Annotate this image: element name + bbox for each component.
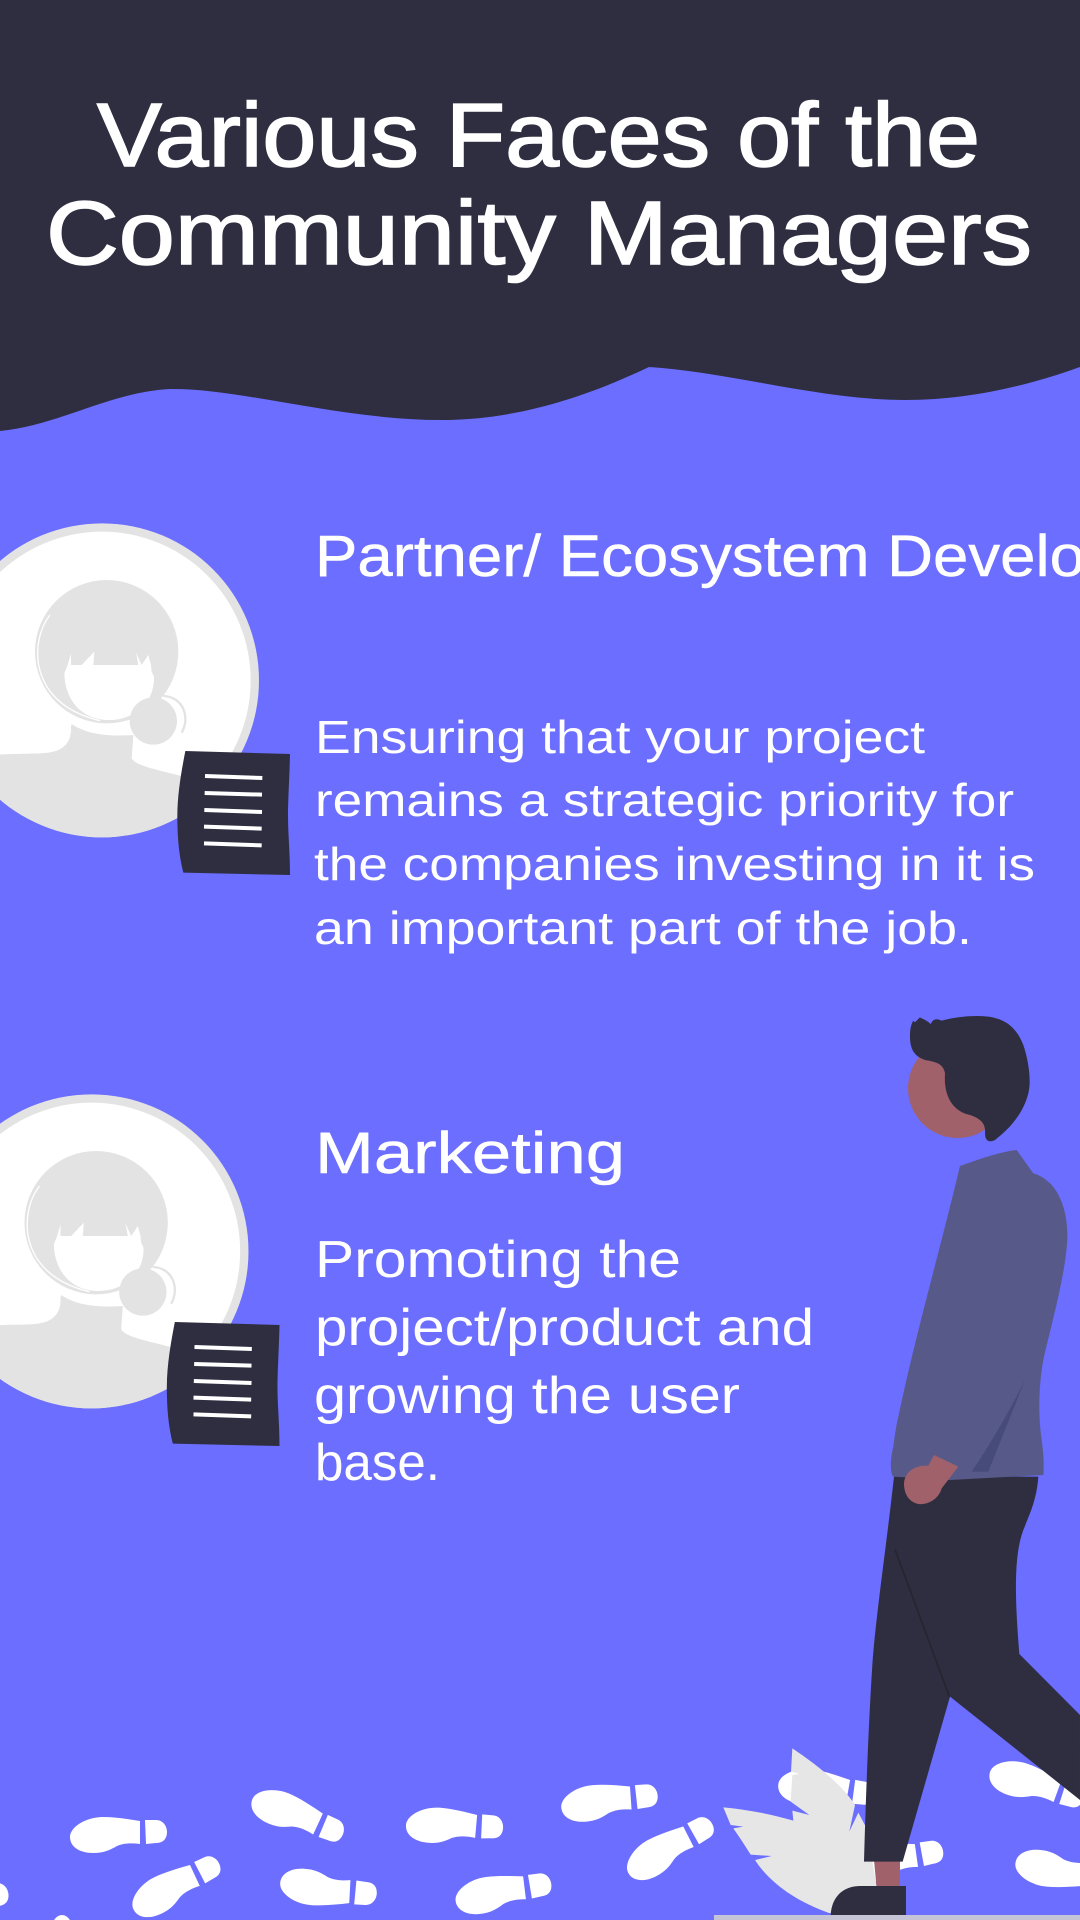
ground line: [714, 1915, 1080, 1920]
text block: marketing description: base.: [315, 1433, 440, 1491]
text block: marketing description: [314, 1230, 814, 1491]
header band with wave: [0, 0, 1080, 431]
text block: partner description: remains a strategic priority for: [315, 774, 1014, 826]
title: Various Faces of the: [97, 86, 980, 186]
icon: partner avatar with document: [0, 523, 290, 875]
title: Community Managers: [46, 184, 1032, 284]
text block: partner description: the companies investing in it is: [314, 838, 1035, 890]
person: legs and shoe: [831, 1477, 1080, 1915]
person walking: [831, 1016, 1080, 1915]
text block: partner description: Ensuring that your project: [315, 711, 925, 763]
person: head and torso: [891, 1016, 1067, 1504]
footprints trail: [0, 1753, 1080, 1920]
heading: marketing: Marketing: [315, 1121, 625, 1186]
text block: marketing description: growing the user: [314, 1366, 740, 1424]
icon: marketing avatar with document: [0, 1094, 279, 1446]
title: [46, 86, 1032, 284]
text block: partner description: [314, 711, 1035, 954]
heading: partner ecosystem: Partner/ Ecosystem Develo: [315, 524, 1080, 589]
plant leaves: [723, 1748, 877, 1913]
text block: partner description: an important part of the job.: [314, 902, 972, 954]
text block: marketing description: Promoting the: [315, 1230, 681, 1288]
text block: marketing description: project/product and: [315, 1298, 814, 1356]
